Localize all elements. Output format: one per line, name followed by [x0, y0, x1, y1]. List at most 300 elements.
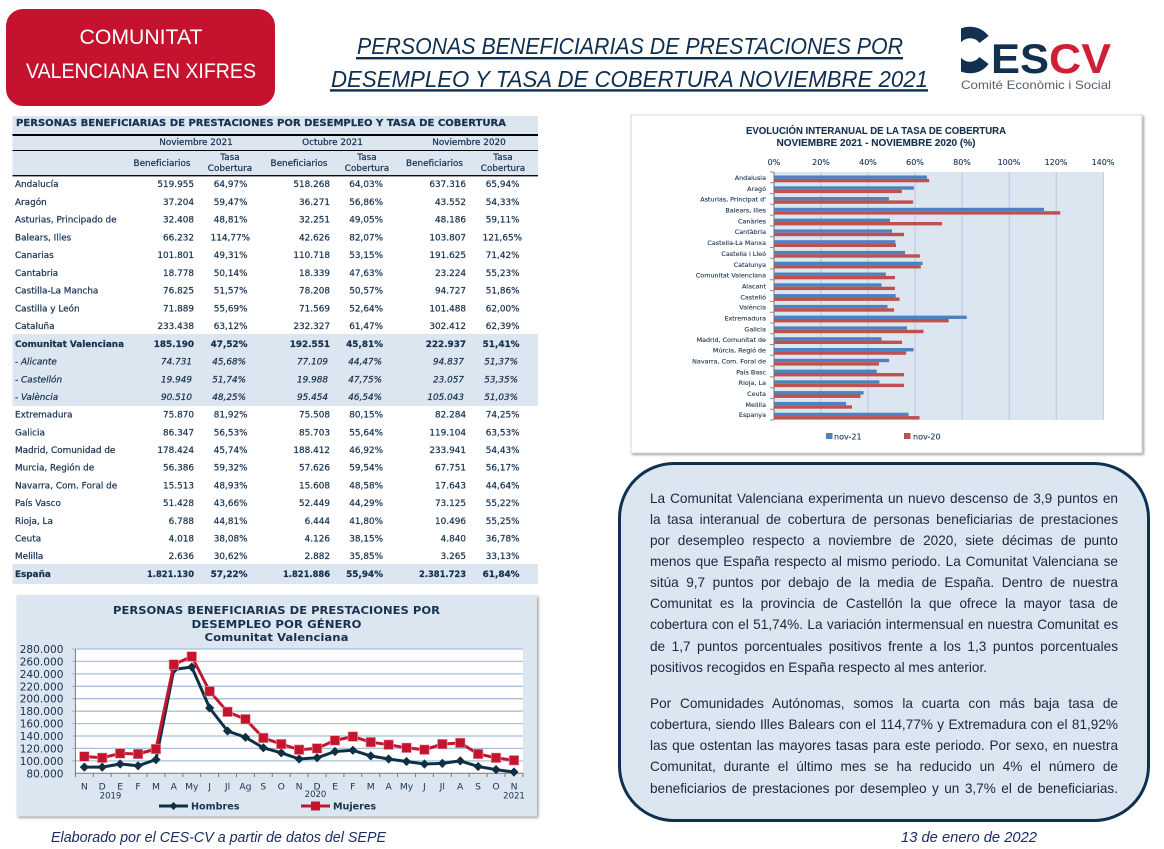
row: Andalucía: 64,03% — [349, 180, 383, 190]
row: Castilla-La Mancha: 51,57% — [214, 286, 248, 296]
row: Comunitat Valenciana: 45,81% — [346, 340, 383, 350]
y axis labels — [20, 644, 64, 780]
row: Ceuta: 4.018 — [169, 534, 194, 544]
row: Canarias: 53,15% — [349, 251, 383, 261]
x axis labels: N — [81, 782, 88, 792]
logo: CES-CV: CV — [1049, 35, 1111, 82]
y axis labels: 80.000 — [26, 768, 64, 780]
row: Andalucía: Andalucía — [15, 180, 58, 190]
line chart: beneficiarios por género — [16, 595, 537, 816]
row: Alicante: 44,47% — [348, 358, 382, 368]
commentary text — [650, 490, 1118, 796]
row: Castilla-La Mancha: 51,86% — [486, 286, 520, 296]
row: Ceuta: 4.840 — [441, 534, 466, 544]
x axis labels: Jl — [224, 782, 230, 792]
row: Galicia: 86.347 — [163, 428, 194, 438]
row: Alicante: 74.731 — [161, 358, 192, 368]
row: Melilla: 3.265 — [441, 552, 466, 562]
x axis labels: N — [296, 782, 303, 792]
row: Cataluña — [15, 322, 520, 332]
legend — [826, 432, 941, 442]
row: España: 61,84% — [483, 570, 520, 580]
row: Madrid — [15, 446, 520, 456]
legend — [159, 802, 376, 812]
row: Madrid: 54,43% — [486, 446, 520, 456]
row: Navarra: 44,64% — [486, 482, 520, 492]
x axis labels: 40% — [859, 158, 877, 167]
row: Canarias: 101.801 — [157, 251, 194, 261]
row: Melilla: 30,62% — [214, 552, 248, 562]
row: Melilla: 2.636 — [169, 552, 194, 562]
row: Galicia: 63,53% — [486, 428, 520, 438]
row: Asturias: 59,11% — [486, 216, 520, 226]
row: Murcia: 56,17% — [486, 464, 520, 474]
row: València: 46,54% — [348, 393, 382, 403]
row: Castilla-La Mancha: 94.727 — [435, 286, 466, 296]
row: Murcia: 67.751 — [435, 464, 466, 474]
source note: Elaborado por el CES-CV a partir de datos del SEPE — [51, 829, 387, 846]
row: Andalucía: 637.316 — [429, 180, 466, 190]
row: Aragón: 37.204 — [163, 198, 194, 208]
row: Castilla y León: 71.889 — [163, 304, 194, 314]
row: Andalucía: 65,94% — [486, 180, 520, 190]
row: Castilla y León: 62,00% — [486, 304, 520, 314]
row: Castilla y León: 52,64% — [349, 304, 383, 314]
row: Balears: Balears, Illes — [15, 234, 72, 244]
category labels: Extremadura — [724, 314, 766, 322]
row: Castilla-La Mancha: 78.208 — [299, 286, 330, 296]
x axis labels — [81, 782, 525, 802]
row: Aragón: 43.552 — [435, 198, 466, 208]
chart title — [746, 124, 1006, 149]
row: València: - València — [15, 392, 58, 403]
row: Melilla: Melilla — [15, 552, 43, 562]
row: Asturias: 49,05% — [349, 216, 383, 226]
category labels: Castella-La Manxa — [707, 239, 766, 247]
y axis labels: 180.000 — [20, 706, 64, 718]
row: Galicia: 85.703 — [299, 428, 330, 438]
row: Asturias: 32.251 — [299, 216, 330, 226]
row: Aragón: Aragón — [15, 197, 47, 208]
row: Extremadura: 81,92% — [214, 410, 248, 420]
table column headers: Tasa — [356, 153, 377, 163]
row: Rioja: 44,81% — [214, 517, 248, 527]
category labels: Asturias, Principat d' — [700, 196, 766, 204]
chart title: Comunitat Valenciana — [204, 632, 348, 644]
row: Cantabria — [15, 269, 520, 279]
row: Asturias: 32.408 — [163, 216, 194, 226]
y axis labels: 260.000 — [20, 656, 64, 668]
row: Balears: 66.232 — [163, 234, 194, 244]
row: Madrid: 233.941 — [429, 446, 466, 456]
row: Balears: 114,77% — [211, 234, 250, 244]
table column headers: Octubre 2021 — [302, 138, 363, 148]
row: Cantabria: 23.224 — [435, 269, 466, 279]
category labels: Castelló — [740, 294, 766, 302]
x axis labels: A — [385, 782, 392, 792]
badge: Comunitat Valenciana en xifres: VALENCIANA EN XIFRES — [26, 60, 256, 83]
commentary text: La Comunitat Valenciana experimenta un nuevo descenso de 3,9 puntos en — [650, 490, 1118, 506]
row: Navarra: Navarra, Com. Foral de — [15, 482, 117, 492]
logo: CES-CV: Comité Econòmic i Social — [961, 78, 1111, 92]
row: Madrid: 45,74% — [214, 446, 248, 456]
row: Rioja: 10.496 — [435, 517, 466, 527]
chart title: NOVIEMBRE 2021 - NOVIEMBRE 2020 (%) — [776, 137, 976, 149]
row: València: 51,03% — [484, 393, 518, 403]
row: València — [15, 392, 518, 403]
row: Aragón: 36.271 — [299, 198, 330, 208]
row: Galicia: 119.104 — [429, 428, 466, 438]
row: Cantabria: 18.778 — [163, 269, 194, 279]
x axis labels: 0% — [768, 158, 781, 167]
commentary text: cobertura, siendo Illes Balears con el 114,77% y Extremadura con el 81,92% — [650, 717, 1118, 732]
row: País Vasco: 73.125 — [435, 499, 466, 509]
row: Castellón — [15, 374, 518, 386]
row: Galicia — [15, 428, 520, 438]
series: Mujeres — [84, 656, 514, 760]
x axis labels: M — [367, 782, 375, 792]
commentary text: cobertura con el 51,74%. La variación intermensual en nuestra Comunitat es — [650, 617, 1118, 632]
row: Canarias: 49,31% — [214, 251, 248, 261]
row: Andalucía: 519.955 — [157, 180, 194, 190]
row: Ceuta — [15, 534, 520, 544]
table heading: PERSONAS BENEFICIARIAS DE PRESTACIONES POR DESEMPLEO Y TASA DE COBERTURA — [16, 118, 506, 129]
commentary text: la tasa interanual de cobertura de personas beneficiarias de prestaciones — [650, 512, 1118, 527]
category labels: Alacant — [742, 282, 766, 290]
row: Ceuta: 4.126 — [305, 534, 330, 544]
row: España — [15, 570, 520, 580]
row: Navarra: 15.608 — [299, 482, 330, 492]
row: Navarra: 15.513 — [163, 482, 194, 492]
commentary text: beneficiarios de prestaciones por desempleo y un 3,7% el de beneficiarias. — [650, 781, 1118, 796]
x axis labels: 2019 — [100, 792, 121, 802]
row: Cataluña: 233.438 — [157, 322, 194, 332]
x axis labels — [768, 158, 1115, 167]
row: Cataluña: 61,47% — [349, 322, 383, 332]
commentary text: Comunitat, durante el último mes se ha reducido un 4% el número de — [650, 759, 1118, 774]
row: Castilla y León — [15, 304, 520, 314]
row: Castilla y León: 71.569 — [299, 304, 330, 314]
category labels: Navarra, Com. Foral de — [692, 358, 766, 366]
x axis labels: F — [350, 782, 355, 792]
y axis labels: 200.000 — [20, 694, 64, 706]
badge: Comunitat Valenciana en xifres — [6, 9, 275, 106]
category labels: Ceuta — [747, 390, 766, 398]
row: Asturias — [15, 216, 520, 226]
row: España: España — [15, 570, 51, 580]
category labels: Balears, Illes — [725, 206, 767, 214]
row: Castilla-La Mancha: 50,57% — [349, 286, 383, 296]
x axis labels: My — [400, 782, 414, 792]
legend: Hombres — [191, 802, 240, 812]
series: nov-21 — [774, 176, 1044, 416]
y axis labels: 120.000 — [20, 743, 64, 755]
row: Rioja: Rioja, La — [15, 517, 53, 527]
row: Asturias: 48.186 — [435, 216, 466, 226]
row: España: 1.821.886 — [283, 570, 330, 580]
row: País Vasco: 44,29% — [349, 499, 383, 509]
row: País Vasco: 52.449 — [299, 499, 330, 509]
table column headers: Noviembre 2020 — [432, 138, 506, 148]
category labels: Múrcia, Regió de — [713, 346, 766, 354]
commentary text: menos que España respecto al mismo periodo. La Comunitat Valenciana se — [650, 554, 1118, 569]
row: Balears: 82,07% — [349, 234, 383, 244]
commentary text: por desempleo respecto a noviembre de 2020, siete décimas de punto — [650, 533, 1118, 548]
row: Alicante: 77.109 — [297, 358, 328, 368]
row: Alicante: - Alicante — [15, 358, 57, 368]
badge: Comunitat Valenciana en xifres: COMUNITAT — [80, 26, 203, 49]
row: Extremadura: Extremadura — [15, 410, 72, 420]
row: Rioja: 55,25% — [486, 517, 520, 527]
row: Extremadura — [15, 410, 520, 420]
row: País Vasco: 43,66% — [214, 499, 248, 509]
x axis labels: Jl — [439, 782, 445, 792]
row: País Vasco: País Vasco — [15, 499, 61, 509]
row: Aragón: 54,33% — [486, 198, 520, 208]
table column headers: Beneficiarios — [134, 159, 191, 169]
row: Cantabria: 50,14% — [214, 269, 248, 279]
row: Castilla-La Mancha — [15, 286, 520, 296]
row: Canarias: 110.718 — [293, 251, 330, 261]
row: Navarra: 48,93% — [214, 482, 248, 492]
row: Castellón: - Castellón — [15, 374, 62, 386]
commentary text: positivos recogidos en España respecto al mes anterior. — [650, 660, 987, 675]
table: beneficiarios y tasa de cobertura — [12, 116, 538, 584]
x axis labels: M — [152, 782, 160, 792]
row: Cantabria: 47,63% — [349, 269, 383, 279]
x axis labels: 20% — [812, 158, 830, 167]
row: Melilla — [15, 552, 520, 562]
commentary text: Comunitat es la provincia de Castellón la que ofrece la mayor tasa de — [650, 596, 1118, 611]
row: Cataluña: 62,39% — [486, 322, 520, 332]
table column headers: Noviembre 2021 — [159, 138, 233, 148]
row: Madrid: 188.412 — [293, 446, 330, 456]
y axis labels: 140.000 — [20, 731, 64, 743]
row: Melilla: 35,85% — [349, 552, 383, 562]
category labels: País Basc — [736, 368, 766, 376]
row: València: 105.043 — [427, 393, 464, 403]
row: Castilla-La Mancha: 76.825 — [163, 286, 194, 296]
category labels: Cantàbria — [735, 228, 766, 236]
x axis labels: D — [99, 782, 106, 792]
x axis labels: My — [185, 782, 199, 792]
row: Galicia: 56,53% — [214, 428, 248, 438]
row: Galicia: 55,64% — [349, 428, 383, 438]
x axis labels: 2020 — [305, 790, 326, 800]
legend: Mujeres — [333, 802, 376, 812]
chart title — [113, 605, 440, 644]
row: Castellón: 19.988 — [297, 376, 328, 386]
row: País Vasco: 55,22% — [486, 499, 520, 509]
row: Castilla y León: 55,69% — [214, 304, 248, 314]
title — [330, 33, 928, 92]
y axis labels: 280.000 — [20, 644, 64, 656]
commentary text: de 1,7 puntos porcentuales positivos frente a los 1,3 puntos porcentuales — [650, 639, 1118, 654]
row: Navarra: 17.643 — [435, 482, 466, 492]
table column headers: Beneficiarios — [406, 159, 463, 169]
chart title: EVOLUCIÓN INTERANUAL DE LA TASA DE COBERTURA — [746, 124, 1006, 137]
row: Balears: 42.626 — [299, 234, 330, 244]
row: Extremadura: 75.870 — [163, 410, 194, 420]
row: Cataluña: 302.412 — [429, 322, 466, 332]
row: España: 57,22% — [211, 570, 248, 580]
row: Rioja: 6.788 — [169, 517, 194, 527]
x axis labels: 60% — [906, 158, 924, 167]
category labels: Espanya — [739, 411, 766, 419]
x axis labels: E — [332, 782, 338, 792]
row: Alicante — [15, 358, 518, 368]
x axis labels: 80% — [953, 158, 971, 167]
row: Comunitat Valenciana: 222.937 — [426, 340, 466, 350]
commentary text: sitúa 9,7 puntos por debajo de la media de España. Dentro de nuestra — [650, 575, 1118, 590]
row: Castellón: 51,74% — [212, 376, 246, 386]
row: Madrid: Madrid, Comunidad de — [15, 446, 115, 456]
x axis labels: A — [171, 782, 178, 792]
x axis labels: O — [492, 782, 500, 792]
row: España: 2.381.723 — [419, 570, 466, 580]
row: Aragón: 59,47% — [214, 198, 248, 208]
row: Navarra — [15, 482, 520, 492]
row: Asturias: 48,81% — [214, 216, 248, 226]
category labels: Castella i Lleó — [721, 250, 766, 258]
row: Rioja: 6.444 — [305, 517, 330, 527]
row: Cantabria: Cantabria — [15, 269, 58, 279]
commentary text: Por Comunidades Autónomas, somos la cuarta con más baja tasa de — [650, 696, 1118, 711]
table column headers: Beneficiarios — [271, 159, 328, 169]
row: Comunitat Valenciana: 192.551 — [290, 340, 330, 350]
x axis labels: J — [422, 782, 426, 792]
x axis labels: J — [207, 782, 211, 792]
row: Aragón: 56,86% — [349, 198, 383, 208]
row: Cantabria: 18.339 — [299, 269, 330, 279]
row: Alicante: 94.837 — [433, 358, 464, 368]
x axis labels: S — [475, 782, 481, 792]
chart title: PERSONAS BENEFICIARIAS DE PRESTACIONES POR — [113, 605, 440, 617]
row: Castellón: 47,75% — [348, 376, 382, 386]
row: Madrid: 178.424 — [157, 446, 194, 456]
row: País Vasco: 51.428 — [163, 499, 194, 509]
panel: commentary box — [618, 462, 1150, 822]
row: Castilla y León: 101.488 — [429, 304, 466, 314]
x axis labels: Ag — [239, 782, 251, 792]
category labels: València — [739, 304, 766, 312]
row: Asturias: Asturias, Principado de — [15, 216, 117, 226]
series: Hombres — [84, 667, 514, 772]
category labels — [692, 174, 767, 419]
commentary text: las que ostentan las mayores tasas para este periodo. Por sexo, en nuestra — [650, 738, 1118, 753]
x axis labels: 2021 — [503, 792, 525, 802]
row: Alicante: 51,37% — [484, 358, 518, 368]
x axis labels: F — [135, 782, 141, 792]
table column headers: Cobertura — [481, 164, 525, 174]
y axis labels: 220.000 — [20, 681, 64, 693]
table column headers: Tasa — [492, 153, 513, 163]
row: Comunitat Valenciana: 47,52% — [211, 340, 248, 350]
x axis labels: E — [117, 782, 123, 792]
category labels: Canàries — [738, 218, 767, 226]
legend: nov-20 — [913, 432, 941, 442]
row: Cantabria: 55,23% — [486, 269, 520, 279]
row: Comunitat Valenciana: Comunitat Valenciana — [15, 340, 124, 350]
category labels: Melilla — [746, 401, 766, 409]
row: Comunitat Valenciana: 51,41% — [483, 340, 520, 350]
date: 13 de enero de 2022 — [901, 829, 1038, 846]
row: Canarias: Canarias — [15, 251, 54, 261]
row: Ceuta: 36,78% — [486, 534, 520, 544]
row: Alicante: 45,68% — [212, 358, 246, 368]
x axis labels: 120% — [1045, 158, 1068, 167]
category labels: Catalunya — [734, 261, 766, 269]
row: Ceuta: 38,15% — [349, 534, 383, 544]
row: Ceuta: 38,08% — [214, 534, 248, 544]
row: Balears: 121,65% — [483, 234, 522, 244]
category labels: Rioja, La — [739, 379, 766, 387]
x axis labels: 100% — [998, 158, 1021, 167]
table column headers: Cobertura — [208, 164, 252, 174]
row: Murcia: 59,54% — [349, 464, 383, 474]
row: España: 1.821.130 — [147, 570, 194, 580]
row: País Vasco — [15, 499, 520, 509]
row: Murcia — [15, 462, 520, 474]
row: Castellón: 53,35% — [484, 376, 518, 386]
row: España: 55,94% — [346, 570, 383, 580]
row: Murcia: 57.626 — [299, 464, 330, 474]
row: Andalucía: 64,97% — [214, 180, 248, 190]
row: Castilla y León: Castilla y León — [15, 304, 80, 314]
row: Canarias: 191.625 — [429, 251, 466, 261]
logo: CES-CV: ES — [991, 35, 1049, 82]
row: Ceuta: Ceuta — [15, 534, 41, 544]
row: Aragón — [15, 197, 520, 208]
row: Cataluña: 232.327 — [293, 322, 330, 332]
y axis labels: 100.000 — [20, 756, 64, 768]
row: Murcia: 56.386 — [163, 464, 194, 474]
row: Comunitat Valenciana — [15, 340, 520, 350]
row: Cataluña: 63,12% — [214, 322, 248, 332]
x axis labels: S — [260, 782, 266, 792]
table column headers: Cobertura — [345, 164, 389, 174]
row: Extremadura: 82.284 — [435, 410, 466, 420]
legend: nov-21 — [834, 432, 862, 442]
y axis labels: 160.000 — [20, 719, 64, 731]
category labels: Andalusia — [735, 174, 766, 182]
x axis labels: O — [278, 782, 285, 792]
row: Andalucía — [15, 180, 520, 190]
row: Melilla: 2.882 — [305, 552, 330, 562]
table column headers — [134, 138, 525, 174]
series: nov-20 — [774, 179, 1060, 420]
row: Balears: 103.807 — [429, 234, 466, 244]
row: Andalucía: 518.268 — [293, 180, 330, 190]
category labels: Aragó — [747, 185, 766, 193]
row: Extremadura: 80,15% — [349, 410, 383, 420]
row: Castellón: 23.057 — [433, 376, 464, 386]
row: Canarias — [15, 251, 520, 261]
table column headers: Tasa — [219, 153, 240, 163]
x axis labels: D — [313, 782, 321, 792]
row: Rioja — [15, 517, 520, 527]
title: DESEMPLEO Y TASA DE COBERTURA NOVIEMBRE 2021 — [331, 66, 928, 92]
row: Extremadura: 75.508 — [299, 410, 330, 420]
chart title: DESEMPLEO POR GÉNERO — [192, 618, 362, 631]
row: Murcia: Murcia, Región de — [15, 462, 94, 474]
row: València: 95.454 — [297, 393, 328, 403]
category labels: Comunitat Valenciana — [696, 272, 766, 280]
row: València: 90.510 — [161, 393, 192, 403]
row: Melilla: 33,13% — [486, 552, 520, 562]
row: Castilla-La Mancha: Castilla-La Mancha — [15, 286, 98, 296]
category labels: Madrid, Comunitat de — [697, 336, 766, 344]
